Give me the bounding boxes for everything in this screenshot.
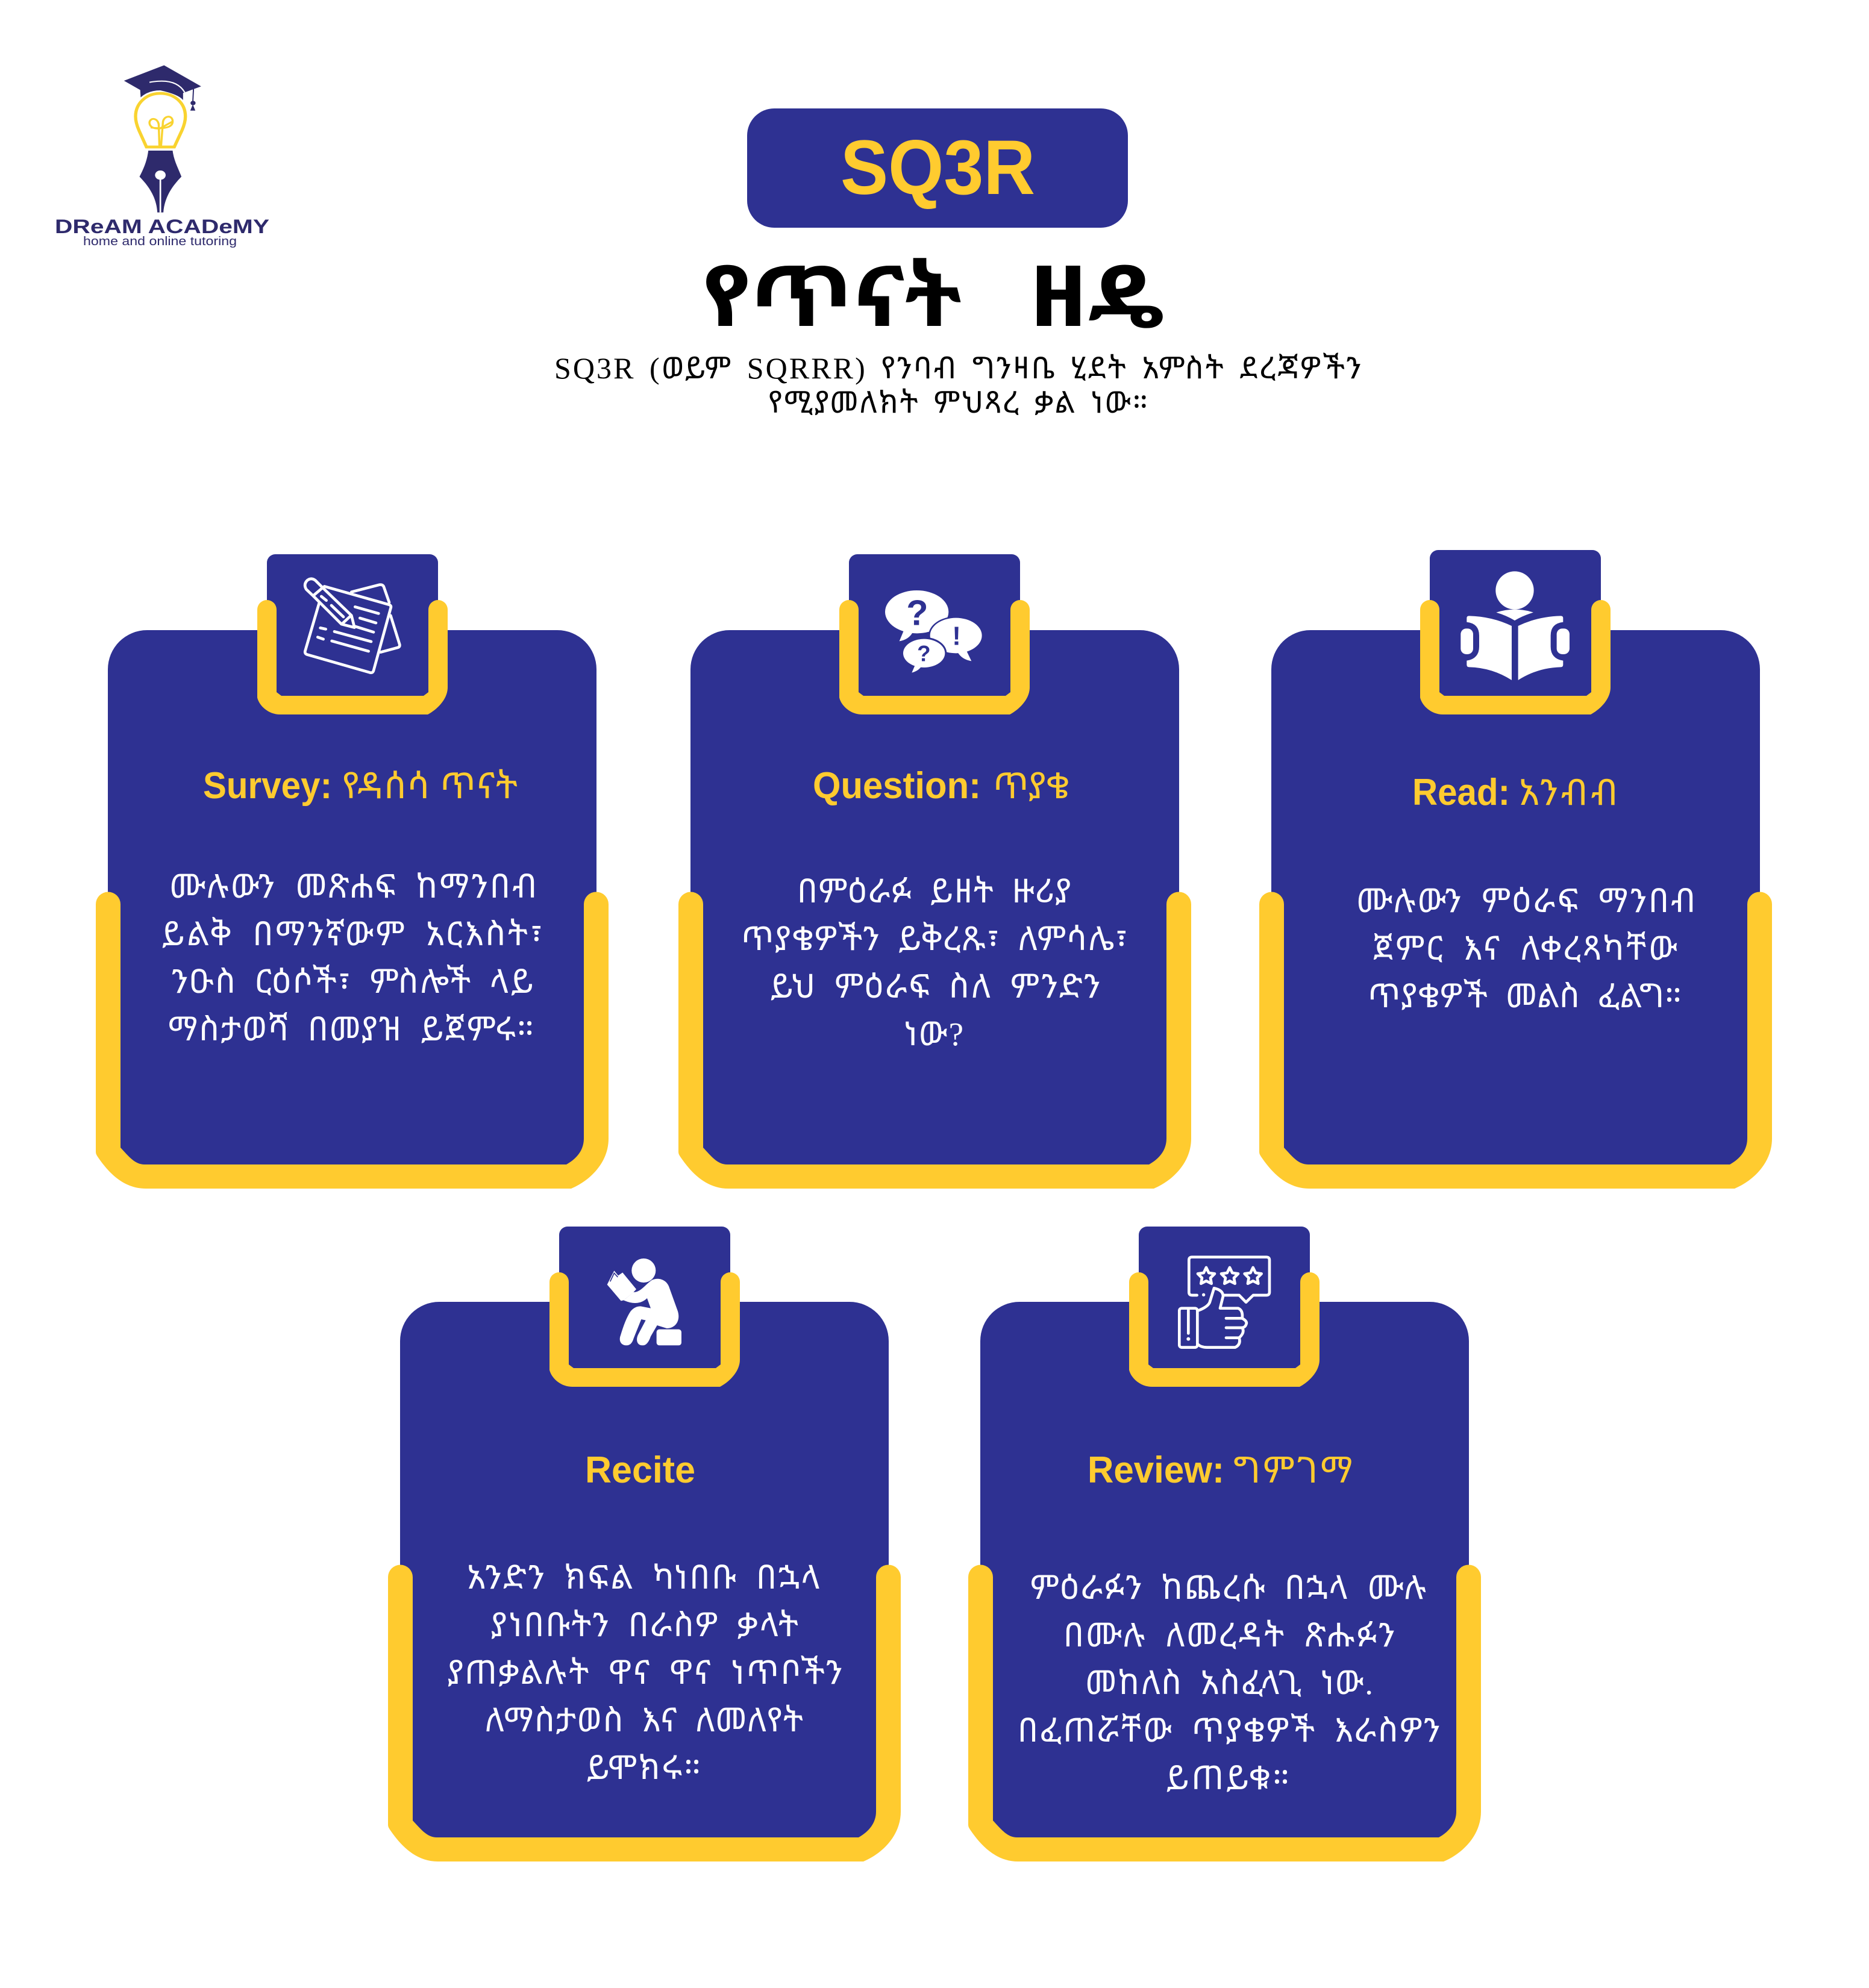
card background xyxy=(1259,630,1772,1189)
title: ዘዴ xyxy=(1029,251,1165,345)
body text xyxy=(1356,883,1695,1014)
body text: ጥያቄዎችን ይቅረጹ፣ ለምሳሌ፣ xyxy=(741,921,1128,957)
heading: Question: Question: xyxy=(813,765,981,807)
icon: notes and pencil xyxy=(305,579,399,673)
body text: ጀምር እና ለቀረጻካቸው xyxy=(1373,930,1677,967)
body text: ይሞክሩ። xyxy=(586,1749,701,1786)
panel: survey xyxy=(96,554,609,1189)
body text: ይህ ምዕራፍ ስለ ምንድን xyxy=(770,968,1100,1005)
icon tab xyxy=(257,554,448,714)
body text: ለማስታወስ እና ለመለየት xyxy=(485,1702,803,1739)
body text: ንዑስ ርዕሶች፣ ምስሎች ላይ xyxy=(172,963,534,1000)
body text: ይጠይቁ። xyxy=(1166,1760,1289,1796)
icon tab xyxy=(839,554,1030,714)
icon: cap, bulb and pen nib xyxy=(124,65,201,213)
body text: አንድን ክፍል ካነበቡ በኋላ xyxy=(467,1559,820,1596)
icon tab xyxy=(1420,550,1611,714)
body text xyxy=(1018,1569,1440,1796)
body text xyxy=(161,868,543,1048)
heading: Review xyxy=(1088,1449,1353,1491)
heading: Review: ግምገማ xyxy=(1233,1451,1353,1490)
body text: ማስታወሻ በመያዝ ይጀምሩ። xyxy=(168,1011,534,1048)
icon: speech bubbles: ? xyxy=(906,592,928,633)
icon: speech bubbles: ? xyxy=(917,641,931,666)
heading badge: SQ3R xyxy=(747,108,1128,228)
heading: Question xyxy=(813,765,1069,807)
body text: ይልቅ በማንኛውም አርእስት፣ xyxy=(161,916,543,952)
logo: Dream Academy xyxy=(55,65,269,248)
body text: ነው? xyxy=(904,1016,963,1052)
icon: thumbs up and stars xyxy=(1179,1257,1269,1348)
icon: seated person reading xyxy=(607,1258,681,1345)
subtitle: SQ3R (ወይም SQRRR) የንባብ ግንዛቤ ሂደት አምስት ደረጃዎችን xyxy=(554,351,1361,385)
heading: Read: Read: xyxy=(1412,772,1510,813)
body text: ጥያቄዎች መልስ ፈልግ። xyxy=(1368,978,1682,1014)
icon tab xyxy=(1129,1227,1320,1387)
body text: መከለስ አስፈላጊ ነው. xyxy=(1085,1664,1373,1701)
heading: Survey: የዳሰሳ ጥናት xyxy=(342,766,518,806)
body text xyxy=(448,1559,842,1786)
card background xyxy=(96,630,609,1189)
body text: ሙሉውን ምዕራፍ ማንበብ xyxy=(1356,883,1695,919)
heading badge: SQ3R: SQ3R xyxy=(841,125,1035,211)
panel: recite xyxy=(388,1227,901,1861)
body text: በሙሉ ለመረዳት ጽሑፉን xyxy=(1063,1617,1395,1654)
panel: question xyxy=(678,554,1191,1189)
heading: Question: ጥያቄ xyxy=(993,766,1069,806)
card background xyxy=(388,1302,901,1861)
icon tab xyxy=(549,1227,740,1387)
subtitle xyxy=(554,351,1361,419)
heading: Read xyxy=(1412,772,1618,813)
heading: Survey xyxy=(203,765,518,807)
logo wordmark: DReAM ACADeMY xyxy=(55,216,269,237)
panel: review xyxy=(968,1227,1481,1861)
body text: በምዕራፉ ይዘት ዙሪያ xyxy=(797,873,1071,910)
card background xyxy=(678,630,1191,1189)
icon: person reading a book xyxy=(1460,571,1570,680)
icon: speech bubbles: ! xyxy=(952,622,961,651)
panel: read xyxy=(1259,550,1772,1189)
heading: Review: Review: xyxy=(1088,1449,1224,1491)
title: የጥናት xyxy=(703,251,962,345)
subtitle: የሚያመለክት ምህጻረ ቃል ነው። xyxy=(768,386,1148,419)
body text: ምዕራፉን ከጨረሱ በኋላ ሙሉ xyxy=(1030,1569,1426,1606)
card background xyxy=(968,1302,1481,1861)
body text: ያነበቡትን በራስዎ ቃላት xyxy=(491,1607,798,1643)
title xyxy=(703,251,1165,345)
heading: Read: አንብብ xyxy=(1519,773,1618,813)
body text: በፈጠሯቸው ጥያቄዎች እራስዎን xyxy=(1018,1712,1440,1749)
body text xyxy=(741,873,1128,1052)
body text: ያጠቃልሉት ዋና ዋና ነጥቦችን xyxy=(448,1654,842,1691)
icon: speech bubbles xyxy=(885,590,983,673)
heading: Survey: Survey: xyxy=(203,765,332,807)
heading: Recite: Recite xyxy=(585,1449,695,1491)
body text: ሙሉውን መጽሐፍ ከማንበብ xyxy=(169,868,537,905)
logo tagline: home and online tutoring xyxy=(83,235,237,248)
